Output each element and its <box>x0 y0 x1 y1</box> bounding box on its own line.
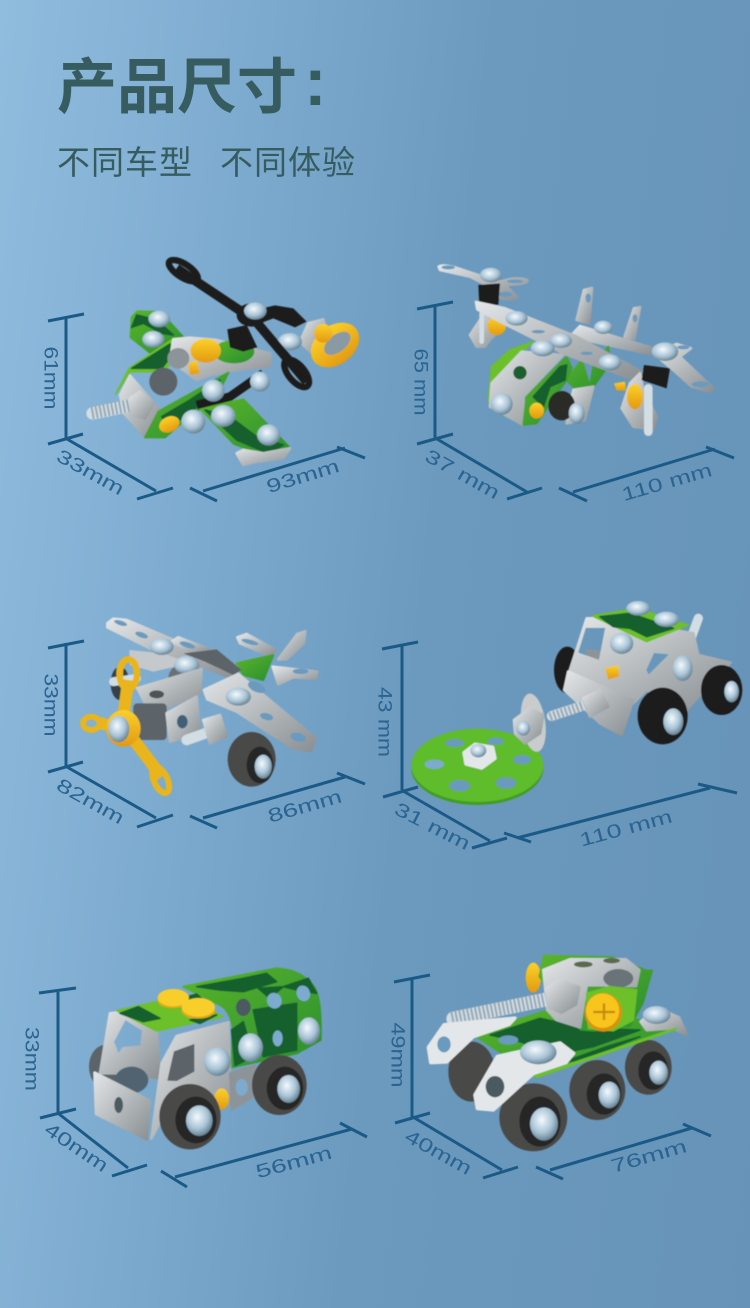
cab frame <box>570 618 731 710</box>
label 43 mm: 43 mm <box>374 687 394 757</box>
yellow wheel <box>302 313 368 377</box>
wheel <box>228 732 276 787</box>
front wheel <box>499 1083 567 1151</box>
label 40mm: 40mm <box>40 1119 112 1177</box>
label 82mm: 82mm <box>53 775 127 829</box>
washer and nut <box>514 692 549 753</box>
truck toy <box>89 968 321 1149</box>
deck <box>473 1011 677 1076</box>
model 5: truck with dimensions <box>20 968 367 1187</box>
label 110 mm: 110 mm <box>577 807 675 851</box>
model 6: tank with dimensions <box>386 956 711 1180</box>
model 1: helicopter with dimensions <box>40 256 368 501</box>
turret <box>526 956 652 1032</box>
dimension lines <box>48 641 365 828</box>
green box <box>183 968 321 1067</box>
dimension lines <box>39 988 367 1187</box>
main wing strip <box>476 302 642 379</box>
model 2: twin-rotor aircraft with dimensions <box>410 265 734 506</box>
label 56mm: 56mm <box>254 1143 334 1183</box>
wheels <box>638 665 742 744</box>
label 33mm: 33mm <box>40 674 60 736</box>
label 37 mm: 37 mm <box>421 446 503 504</box>
label 76mm: 76mm <box>609 1136 689 1178</box>
roof <box>593 601 688 642</box>
subtitle: 不同体验 <box>220 144 356 181</box>
label 31 mm: 31 mm <box>391 799 473 855</box>
subtitle: 不同车型 <box>57 144 193 181</box>
back wheels <box>448 1040 672 1120</box>
label 110 mm: 110 mm <box>619 460 715 506</box>
car toy with disc <box>411 601 742 805</box>
label 33mm: 33mm <box>20 1027 42 1091</box>
label 33mm: 33mm <box>53 446 127 500</box>
dimension lines <box>394 975 711 1179</box>
dimension lines <box>382 642 737 848</box>
green disc <box>411 729 543 805</box>
label 49mm: 49mm <box>386 1022 408 1088</box>
tank toy <box>428 956 687 1151</box>
front wheel <box>159 1084 221 1149</box>
helicopter toy <box>92 256 368 465</box>
title: : <box>304 44 327 120</box>
dimension lines <box>417 302 734 501</box>
cab side <box>151 1022 231 1139</box>
label 93mm: 93mm <box>264 456 342 498</box>
threaded rod <box>550 690 608 717</box>
title: 产品尺寸 <box>57 54 297 121</box>
label 40mm: 40mm <box>401 1126 475 1180</box>
biplane toy <box>83 619 317 795</box>
dimension lines <box>48 314 365 501</box>
aircraft toy <box>439 265 713 432</box>
label 86mm: 86mm <box>266 786 344 828</box>
barrel <box>452 980 579 1019</box>
front roof <box>117 989 223 1031</box>
black rotor <box>166 256 313 391</box>
label 65 mm: 65 mm <box>410 348 430 416</box>
label 61mm: 61mm <box>40 346 60 410</box>
rear wheel <box>252 1055 307 1115</box>
model 3: biplane with dimensions <box>40 619 365 829</box>
model 4: road roller car with dimensions <box>374 601 742 855</box>
yellow propeller <box>83 659 173 795</box>
